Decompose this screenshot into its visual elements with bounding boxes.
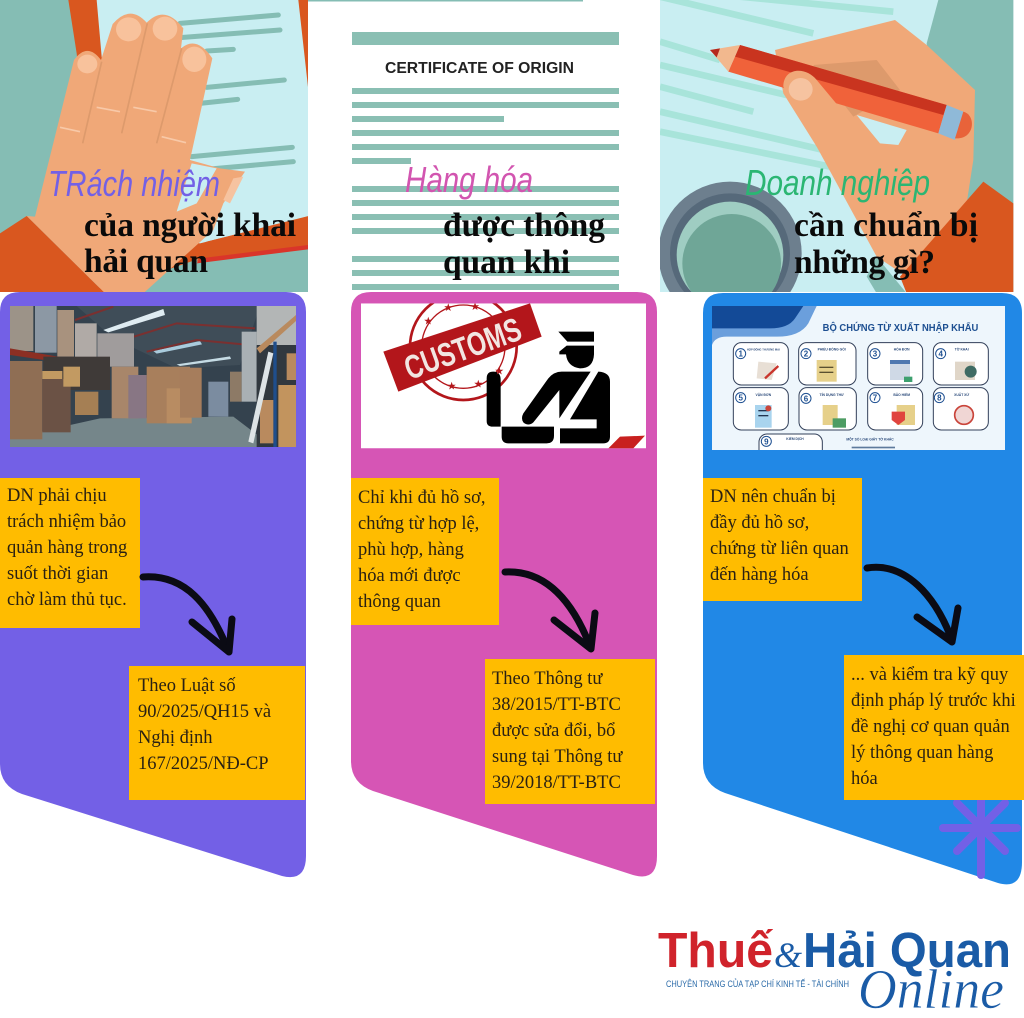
logo: Thuế & Hải Quan Online: Thuế bbox=[658, 924, 774, 978]
text box: circular reference: được sửa đổi, bổ bbox=[492, 721, 615, 741]
image: customs stamp and officer: ★ bbox=[447, 379, 456, 392]
heading: Trách nhiệm: của người khai bbox=[84, 207, 296, 244]
text box: circular reference: sung tại Thông tư bbox=[492, 747, 623, 767]
text box: prepare documents: đầy đủ hồ sơ, bbox=[710, 513, 809, 533]
text box: circular reference bbox=[485, 659, 655, 804]
image: customs stamp and officer: ★ bbox=[470, 300, 480, 313]
icon: purple asterisk bbox=[943, 798, 1017, 875]
text box: circular reference: Theo Thông tư bbox=[492, 669, 603, 689]
text box: check regulations: định pháp lý trước khi bbox=[851, 691, 1016, 711]
logo: Thuế & Hải Quan Online: CHUYÊN TRANG CỦA TẠP CHÍ KINH TẾ - TÀI CHÍNH bbox=[666, 978, 849, 990]
header illustration: certificate of origin bbox=[308, 0, 660, 292]
logo: Thuế & Hải Quan Online: & bbox=[774, 935, 802, 975]
image: customs stamp and officer: ★ bbox=[474, 378, 483, 391]
image: import-export document set: 5 bbox=[738, 394, 743, 403]
heading: Doanh nghiệp: cần chuẩn bị bbox=[794, 207, 978, 244]
text box: prepare documents bbox=[703, 478, 862, 601]
photo: warehouse bbox=[10, 306, 296, 447]
image: import-export document set: HÓA ĐƠN bbox=[894, 347, 910, 352]
text box: check regulations: lý thông quan hàng bbox=[851, 743, 993, 763]
image: import-export document set: 2 bbox=[804, 350, 809, 359]
image: import-export document set: BẢO HIỂM bbox=[893, 392, 910, 397]
image: import-export document set: XUẤT XỨ bbox=[954, 392, 969, 397]
text box: sufficient documents: thông quan bbox=[358, 592, 441, 612]
panel: pink card bbox=[351, 292, 657, 876]
text box: circular reference: 38/2015/TT-BTC bbox=[492, 695, 621, 715]
image: import-export document set: 3 bbox=[873, 350, 878, 359]
certificate title: CERTIFICATE OF ORIGIN bbox=[385, 60, 574, 77]
text box: storage responsibility: chờ làm thủ tục. bbox=[7, 590, 127, 610]
image: import-export document set: TỜ KHAI bbox=[955, 347, 969, 352]
image: import-export document set: HỢP ĐỒNG THƯƠNG MẠI bbox=[747, 347, 780, 352]
image: import-export document set: VẬN ĐƠN bbox=[756, 392, 772, 397]
heading: Hàng hóa: quan khi bbox=[443, 244, 570, 281]
heading: Doanh nghiệp bbox=[745, 162, 978, 281]
text box: check regulations bbox=[844, 655, 1024, 800]
image: import-export document set: 6 bbox=[804, 394, 809, 403]
logo: Thuế & Hải Quan Online bbox=[658, 924, 1011, 1018]
text box: sufficient documents: chứng từ hợp lệ, bbox=[358, 514, 479, 534]
heading: Doanh nghiệp: những gì? bbox=[794, 244, 935, 281]
text box: storage responsibility: quản hàng trong bbox=[7, 538, 127, 558]
image: import-export document set: 7 bbox=[873, 394, 878, 403]
heading: Trách nhiệm: TRách nhiệm bbox=[48, 163, 220, 204]
image: import-export document set: PHIẾU ĐÓNG GÓI bbox=[818, 347, 846, 352]
text box: check regulations: ... và kiểm tra kỹ quy bbox=[851, 665, 1009, 685]
text box: sufficient documents: phù hợp, hàng bbox=[358, 540, 464, 560]
heading: Trách nhiệm bbox=[48, 163, 296, 280]
text box: prepare documents: đến hàng hóa bbox=[710, 565, 809, 585]
text box: sufficient documents bbox=[351, 478, 499, 625]
image: import-export document set bbox=[712, 306, 1005, 464]
text box: legal basis bbox=[129, 666, 305, 800]
heading: Hàng hóa: Hàng hóa bbox=[405, 159, 533, 200]
officer silhouette bbox=[487, 332, 610, 443]
image: import-export document set: KIỂM DỊCH bbox=[786, 436, 804, 441]
image: import-export document set: MỘT SỐ LOẠI GIẤY TỜ KHÁC bbox=[846, 437, 894, 442]
text box: storage responsibility bbox=[0, 478, 140, 628]
text box: sufficient documents: hóa mới được bbox=[358, 566, 461, 586]
text box: sufficient documents: Chỉ khi đủ hồ sơ, bbox=[358, 488, 485, 508]
officer silhouette: ★ bbox=[495, 364, 504, 377]
image: import-export document set: 1 bbox=[738, 350, 743, 359]
logo: Thuế & Hải Quan Online: Hải Quan bbox=[803, 924, 1011, 978]
image: customs stamp and officer: ★ bbox=[424, 314, 433, 327]
panel: purple card bbox=[0, 292, 306, 877]
header illustration: hand with pencil and magnifier bbox=[660, 0, 1014, 292]
heading: Doanh nghiệp: Doanh nghiệp bbox=[745, 162, 930, 203]
heading: Trách nhiệm: hải quan bbox=[84, 243, 208, 280]
heading: Hàng hóa: được thông bbox=[443, 207, 605, 244]
text box: legal basis: 90/2025/QH15 và bbox=[138, 702, 271, 722]
image: import-export document set: 9 bbox=[764, 437, 769, 446]
text box: storage responsibility: trách nhiệm bảo bbox=[7, 512, 126, 532]
image: import-export document set: 4 bbox=[938, 350, 943, 359]
text box: circular reference: 39/2018/TT-BTC bbox=[492, 773, 621, 793]
text box: legal basis: Nghị định bbox=[138, 728, 213, 748]
text box: legal basis: 167/2025/NĐ-CP bbox=[138, 754, 269, 774]
heading: Hàng hóa bbox=[405, 159, 605, 281]
image: customs stamp and officer: ★ bbox=[444, 301, 453, 314]
image: customs stamp and officer bbox=[361, 293, 646, 448]
arrow bbox=[505, 572, 595, 649]
image: customs stamp and officer: CUSTOMS bbox=[400, 311, 527, 388]
text box: check regulations: đề nghị cơ quan quản bbox=[851, 717, 1010, 737]
text box: check regulations: hóa bbox=[851, 769, 878, 789]
image: import-export document set: TÍN DỤNG THƯ bbox=[820, 392, 844, 397]
image: import-export document set: BỘ CHỨNG TỪ XUẤT NHẬP KHẨU bbox=[823, 321, 978, 334]
image: import-export document set: 8 bbox=[937, 394, 942, 403]
panel: blue card bbox=[703, 293, 1024, 884]
text box: storage responsibility: DN phải chịu bbox=[7, 486, 107, 506]
text box: legal basis: Theo Luật số bbox=[138, 676, 236, 696]
text box: storage responsibility: suốt thời gian bbox=[7, 564, 108, 584]
header illustration: hand on document bbox=[0, 0, 308, 293]
arrow bbox=[143, 577, 232, 652]
text box: prepare documents: chứng từ liên quan bbox=[710, 539, 849, 559]
text box: prepare documents: DN nên chuẩn bị bbox=[710, 487, 836, 507]
arrow bbox=[867, 567, 958, 642]
